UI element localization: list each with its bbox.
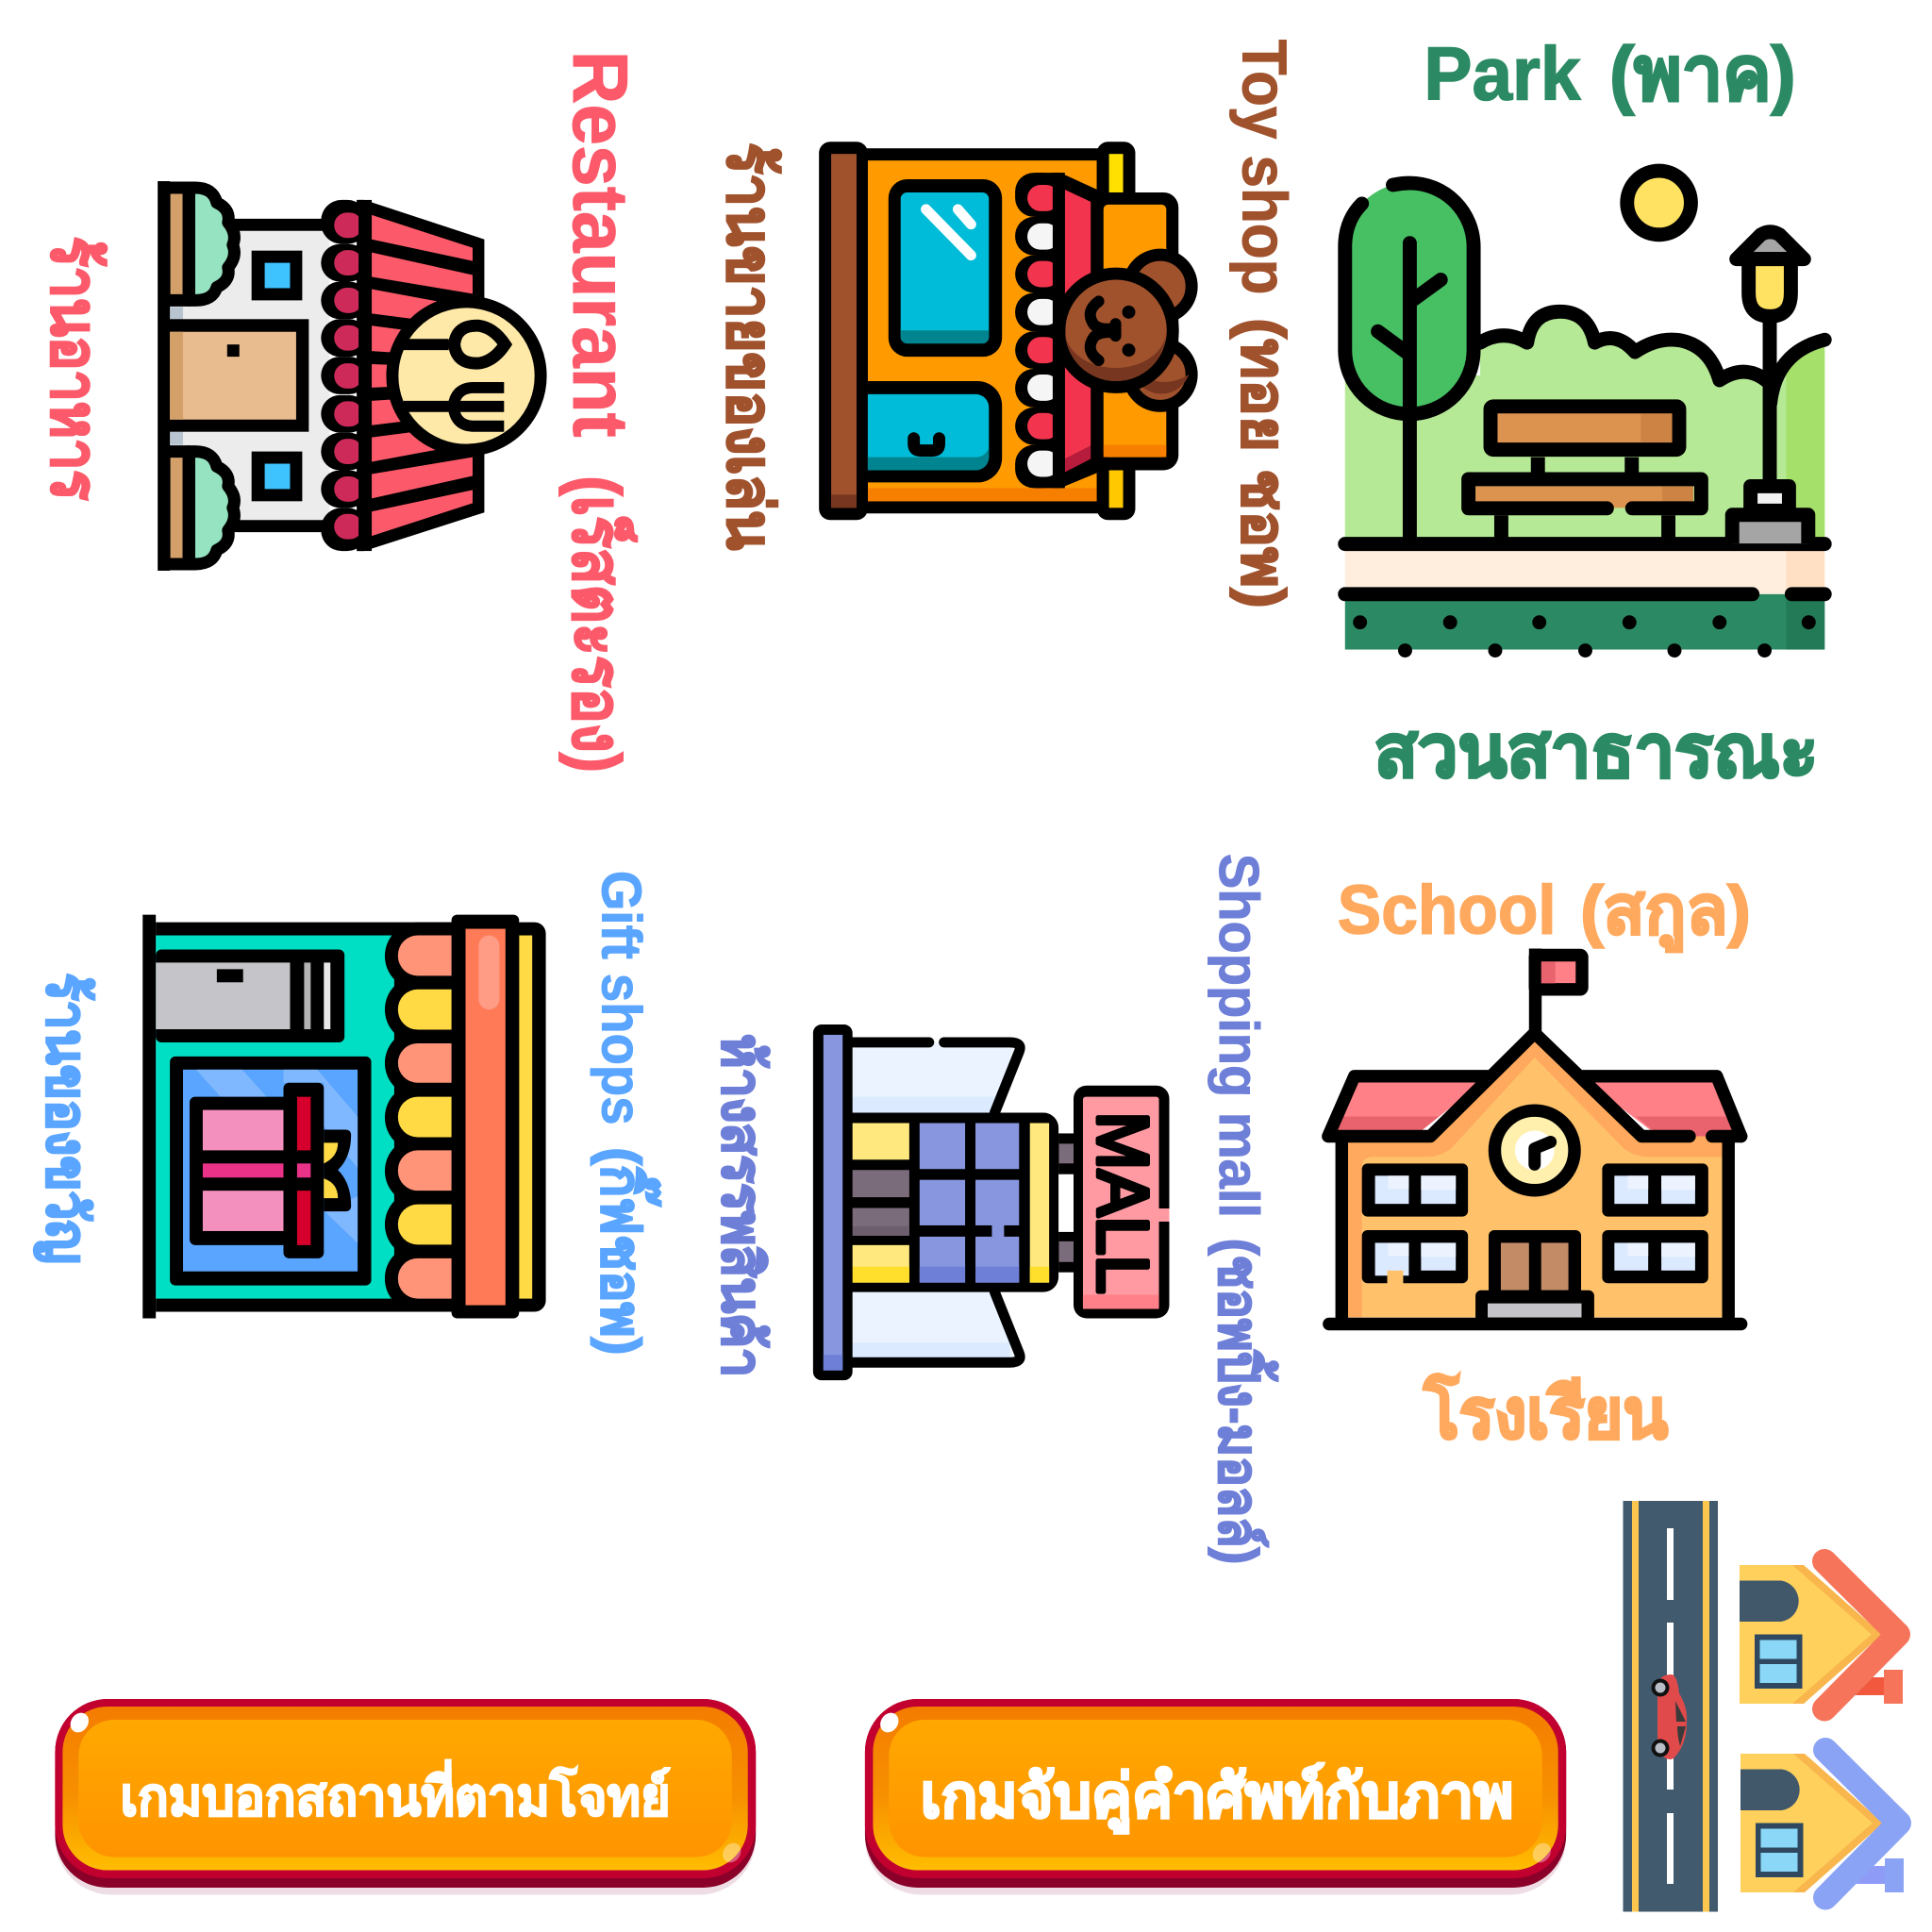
roofs	[1328, 1076, 1741, 1137]
road	[1623, 1501, 1718, 1911]
button text: เกมจับคู่คำศัพท์กับภาพ	[921, 1762, 1513, 1834]
panel: toy shop	[715, 40, 1298, 608]
shutter	[156, 949, 344, 1042]
heading: School: School	[1338, 871, 1557, 949]
sign text: MALL	[1082, 1112, 1161, 1294]
side trim	[507, 923, 546, 1312]
MALL sign	[1074, 1086, 1169, 1318]
window with gift	[170, 1057, 372, 1286]
window	[889, 179, 1002, 357]
heading: Shopping mall Thai transcription: (ชอพปิ้ง-มอลล์)	[1208, 1239, 1278, 1564]
sun	[1627, 171, 1690, 235]
wings	[852, 1042, 1020, 1362]
button: word matching game	[865, 1699, 1566, 1894]
windows	[252, 251, 302, 501]
panel: shopping mall	[710, 854, 1278, 1564]
label: Thai park: สวนสาธารณะ	[1374, 711, 1818, 792]
sign connectors	[1058, 1133, 1075, 1273]
car	[1651, 1674, 1687, 1759]
icon: school building	[1328, 949, 1741, 1324]
entrance	[1475, 1230, 1594, 1324]
heading: Shopping mall: Shopping mall	[1208, 854, 1271, 1218]
heading: Gift shops Thai transcription: (กิ๊ฟชอพ)	[590, 1147, 661, 1355]
icon: gift shop building	[142, 915, 546, 1319]
label: Thai mall: ห้างสรรพสินค้า	[710, 1034, 771, 1377]
heading: Restaurant Thai transcription: (เร็สตะรอง)	[558, 475, 638, 773]
button text: เกมบอกสถานที่ตามโจทย์	[121, 1759, 671, 1826]
walls	[1329, 1033, 1741, 1324]
button: location game	[55, 1699, 756, 1894]
panel: gift shop	[35, 871, 661, 1355]
ground	[1345, 544, 1824, 658]
awning	[321, 200, 484, 551]
signs and tabs	[1097, 142, 1135, 520]
street lamp	[1732, 232, 1808, 543]
panel: park	[1345, 31, 1824, 792]
bench	[1469, 407, 1701, 543]
door	[164, 319, 308, 432]
heading: School Thai transcription: (สกูล)	[1581, 874, 1751, 953]
heading: Gift shops: Gift shops	[590, 871, 653, 1125]
heading: Park Thai transcription: (พาค)	[1609, 31, 1795, 115]
label: Thai restaurant: ร้านอาหาร	[39, 237, 109, 500]
teddy bear	[1059, 255, 1191, 406]
bushes	[164, 188, 234, 564]
hedge	[1345, 311, 1824, 543]
column	[452, 915, 519, 1319]
clock	[1494, 1110, 1574, 1191]
icon: toy shop building	[819, 142, 1191, 520]
panel: restaurant	[39, 51, 643, 773]
icon: park scene	[1345, 171, 1824, 658]
icon: restaurant building	[158, 181, 541, 571]
flag	[1529, 949, 1582, 1035]
tree	[1345, 183, 1474, 543]
panel: school	[1328, 871, 1751, 1453]
heading: Park: Park	[1424, 31, 1581, 115]
gift box	[190, 1083, 351, 1258]
side panel	[1092, 192, 1178, 470]
center block	[852, 1113, 1058, 1292]
label: Thai toy shop: ร้านขายของเล่น	[715, 142, 784, 550]
heading: Toy shop Thai transcription: (ทอย ชอพ)	[1229, 318, 1296, 608]
label: Thai school: โรงเรียน	[1423, 1373, 1668, 1453]
plate with spoon and fork	[392, 302, 541, 450]
scalloped awning	[385, 923, 488, 1312]
heading: Restaurant: Restaurant	[557, 51, 643, 438]
heading: Toy shop: Toy shop	[1228, 40, 1298, 294]
house: red roof	[1740, 1561, 1903, 1709]
panel: road with houses	[1623, 1501, 1904, 1911]
side pillar	[813, 1024, 853, 1380]
windows	[1362, 1163, 1708, 1284]
icon: shopping mall building	[813, 1024, 1169, 1380]
door	[868, 381, 1002, 482]
house: blue roof	[1740, 1750, 1904, 1898]
label: Thai gift shop: ร้านของขวัญ	[35, 973, 97, 1264]
awning	[1015, 173, 1104, 488]
